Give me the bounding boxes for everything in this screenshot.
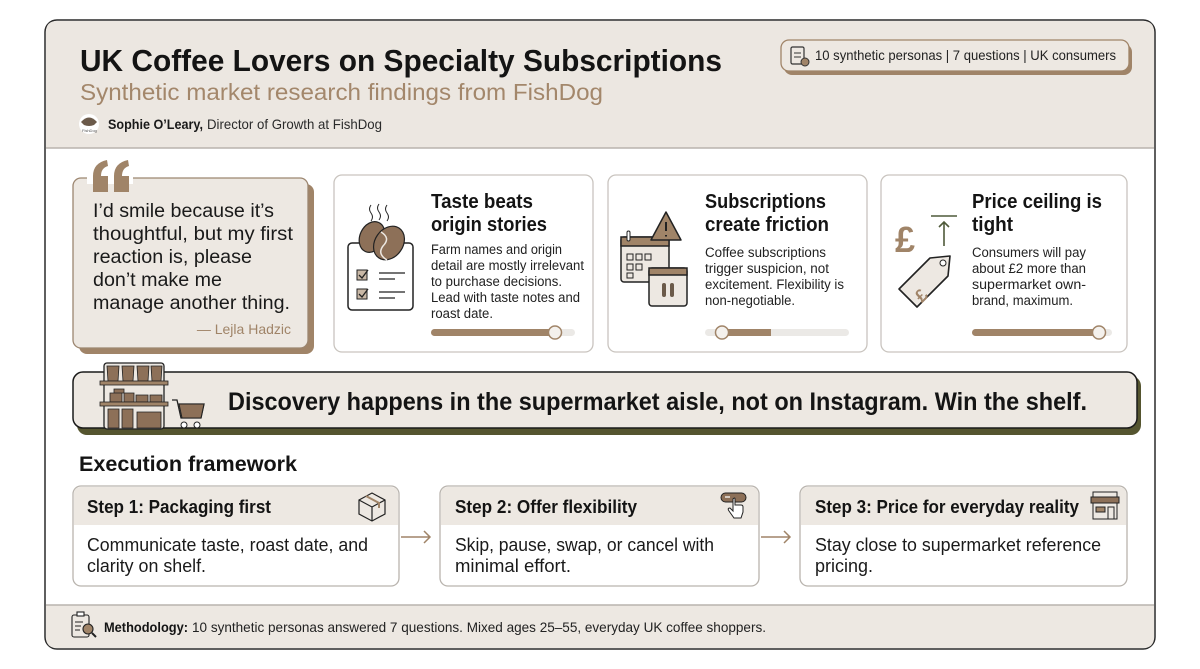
icon: clipboard search bbox=[72, 612, 96, 637]
icon: pound price tag: £ bbox=[911, 285, 932, 306]
step 2: Skip, pause, swap, or cancel with bbox=[455, 535, 714, 555]
panel: price ceiling: about £2 more than bbox=[972, 261, 1086, 276]
author line bbox=[79, 114, 382, 134]
icon: coffee checklist bbox=[348, 204, 413, 310]
footer: methodology bbox=[46, 605, 1154, 648]
panel: subscriptions create friction: non-negotiable. bbox=[705, 293, 795, 308]
panel: price ceiling bbox=[881, 175, 1127, 352]
panel: taste beats origin stories: Farm names and origin bbox=[431, 242, 562, 257]
footer: methodology: 10 synthetic personas answered 7 questions. Mixed ages 25–55, everyday UK coffee shoppers. bbox=[192, 619, 766, 635]
slider bbox=[972, 326, 1112, 339]
panel: price ceiling: Price ceiling is bbox=[972, 191, 1102, 213]
badge: 10 synthetic personas | 7 questions | UK consumers bbox=[815, 47, 1116, 63]
icon: storefront bbox=[1091, 492, 1119, 519]
panel: subscriptions create friction: Subscriptions bbox=[705, 191, 826, 213]
arrow bbox=[401, 531, 430, 543]
quote card: I’d smile because it’s bbox=[93, 201, 274, 222]
panel: price ceiling: brand, maximum. bbox=[972, 293, 1073, 308]
panel: subscriptions create friction: create friction bbox=[705, 214, 829, 236]
panel: taste beats origin stories: roast date. bbox=[431, 306, 493, 321]
quote card bbox=[73, 160, 314, 354]
quote card: thoughtful, but my first bbox=[93, 224, 294, 245]
badge bbox=[781, 40, 1132, 75]
icon: quote mark bbox=[93, 160, 129, 192]
banner bbox=[73, 363, 1141, 435]
panel: taste beats origin stories: Taste beats bbox=[431, 191, 533, 213]
quote card: don’t make me bbox=[93, 270, 222, 291]
panel: taste beats origin stories: origin stories bbox=[431, 214, 547, 236]
title: UK Coffee Lovers on Specialty Subscriptions bbox=[80, 43, 722, 78]
footer: methodology: Methodology: bbox=[104, 619, 188, 635]
quote card: — Lejla Hadzic bbox=[197, 321, 291, 337]
slider bbox=[431, 326, 575, 339]
step 3: pricing. bbox=[815, 556, 873, 576]
step 3: Stay close to supermarket reference bbox=[815, 535, 1101, 555]
panel: subscriptions create friction: trigger suspicion, not bbox=[705, 261, 829, 276]
quote card: reaction is, please bbox=[93, 247, 252, 268]
author line: FishDog bbox=[82, 128, 97, 133]
step 1: clarity on shelf. bbox=[87, 556, 206, 576]
panel: taste beats origin stories: detail are mostly irrelevant bbox=[431, 258, 584, 273]
slider bbox=[705, 326, 849, 339]
panel: taste beats origin stories bbox=[334, 175, 593, 352]
quote card: manage another thing. bbox=[93, 293, 290, 314]
author line: Sophie O’Leary, bbox=[108, 116, 203, 132]
panel: subscriptions create friction: excitement. Flexibility is bbox=[705, 277, 844, 292]
step 1 bbox=[73, 486, 399, 586]
icon: cart bbox=[172, 400, 204, 428]
arrow bbox=[761, 531, 790, 543]
panel: price ceiling: supermarket own- bbox=[972, 277, 1086, 292]
icon: toggle with hand bbox=[721, 493, 746, 518]
step 2: Step 2: Offer flexibility bbox=[455, 497, 637, 517]
panel: price ceiling: Consumers will pay bbox=[972, 245, 1086, 260]
icon: supermarket shelf bbox=[100, 363, 168, 429]
step 1: Step 1: Packaging first bbox=[87, 497, 271, 517]
panel: subscriptions create friction: Coffee subscriptions bbox=[705, 245, 826, 260]
step 2 bbox=[440, 486, 759, 586]
panel: price ceiling: tight bbox=[972, 214, 1013, 236]
banner: Discovery happens in the supermarket aisle, not on Instagram. Win the shelf. bbox=[228, 388, 1087, 416]
step 2: minimal effort. bbox=[455, 556, 571, 576]
panel: taste beats origin stories: Lead with taste notes and bbox=[431, 290, 580, 305]
icon: pound price tag bbox=[895, 216, 957, 307]
icon: calendar warning bbox=[621, 212, 687, 306]
step 1: Communicate taste, roast date, and bbox=[87, 535, 368, 555]
step 3 bbox=[800, 486, 1127, 586]
panel: subscriptions create friction bbox=[608, 175, 867, 352]
icon: pound price tag: £ bbox=[895, 219, 915, 260]
heading: execution framework: Execution framework bbox=[79, 453, 297, 476]
step 3: Step 3: Price for everyday reality bbox=[815, 497, 1079, 517]
subtitle: Synthetic market research findings from FishDog bbox=[80, 79, 603, 105]
author line: Director of Growth at FishDog bbox=[207, 116, 382, 132]
panel: taste beats origin stories: to purchase decisions. bbox=[431, 274, 562, 289]
icon: box bbox=[359, 493, 385, 521]
